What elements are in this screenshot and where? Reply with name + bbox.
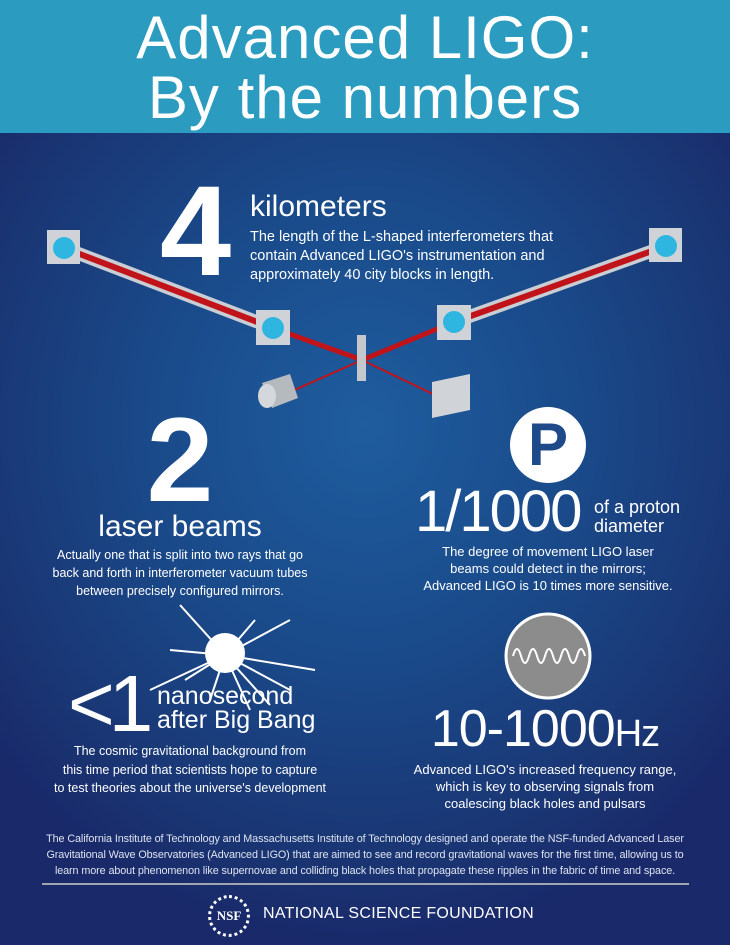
title: By the numbers xyxy=(148,64,582,131)
stat: 10-1000Hz: which is key to observing signals from xyxy=(436,779,654,794)
stat: 1/1000 proton: Advanced LIGO is 10 times more sensitive. xyxy=(423,578,673,593)
icon: proton P xyxy=(510,407,586,483)
text: between precisely configured mirrors. xyxy=(76,584,284,598)
stat: <1 nanosecond xyxy=(54,659,326,795)
stat: <1 nanosecond: The cosmic gravitational background from xyxy=(74,744,306,758)
stat: 1/1000 proton: The degree of movement LIGO laser xyxy=(442,544,654,559)
stat: <1 nanosecond: to test theories about the universe's development xyxy=(54,781,326,795)
NSF logo xyxy=(208,895,534,937)
stat: 1/1000 proton: diameter xyxy=(594,516,664,536)
stat: 4 kilometers: contain Advanced LIGO's instrumentation and xyxy=(250,248,545,264)
stat: 4 kilometers: approximately 40 city blocks in length. xyxy=(250,267,494,283)
NSF logo: NSF xyxy=(217,908,241,923)
stat: <1 nanosecond: nanosecond xyxy=(157,682,293,710)
stat: 4 kilometers: The length of the L-shaped interferometers that xyxy=(250,229,553,245)
stat: <1 nanosecond: after Big Bang xyxy=(157,706,315,734)
stat: <1 nanosecond: <1 xyxy=(68,659,147,748)
stat: 1/1000 proton: beams could detect in the mirrors; xyxy=(450,561,646,576)
icon: proton P: P xyxy=(528,411,568,478)
footer text xyxy=(46,833,684,877)
title: Advanced LIGO: xyxy=(136,4,594,71)
footer text: learn more about phenomenon like supernovae and colliding black holes that propagate these ripples in the fabric of time and space. xyxy=(55,865,675,877)
icon: frequency wave xyxy=(504,612,592,700)
NSF logo: NATIONAL SCIENCE FOUNDATION xyxy=(263,905,534,922)
stat: 10-1000Hz: Advanced LIGO's increased frequency range, xyxy=(414,762,676,777)
stat: 2 laser beams: back and forth in interferometer vacuum tubes xyxy=(52,566,308,580)
stat: 4 kilometers: kilometers xyxy=(250,190,387,223)
stat: 1/1000 proton xyxy=(415,479,680,593)
stat: <1 nanosecond: this time period that scientists hope to capture xyxy=(63,762,317,776)
stat: 2 laser beams: 2 xyxy=(147,393,213,527)
stat: 4 kilometers xyxy=(160,160,553,303)
stat: 1/1000 proton: of a proton xyxy=(594,497,680,517)
title xyxy=(136,4,594,131)
stat: 4 kilometers: 4 xyxy=(160,160,231,303)
stat: 2 laser beams xyxy=(52,393,308,598)
stat: 10-1000Hz xyxy=(414,700,676,811)
stat: 2 laser beams: laser beams xyxy=(98,510,262,543)
footer text: The California Institute of Technology and Massachusetts Institute of Technology designed and operate the NSF-funded Advanced Laser xyxy=(46,833,684,845)
icon: big bang starburst xyxy=(150,604,316,710)
stat: 1/1000 proton: 1/1000 xyxy=(415,479,580,544)
stat: 10-1000Hz: 10-1000Hz xyxy=(431,700,659,758)
footer text: Gravitational Wave Observatories (Advanced LIGO) that are aimed to see and record gravitational waves for the first time, allowing us to xyxy=(46,849,684,861)
stat: 2 laser beams: Actually one that is split into two rays that go xyxy=(57,548,303,562)
text: coalescing black holes and pulsars xyxy=(445,796,645,811)
header band xyxy=(0,0,730,133)
